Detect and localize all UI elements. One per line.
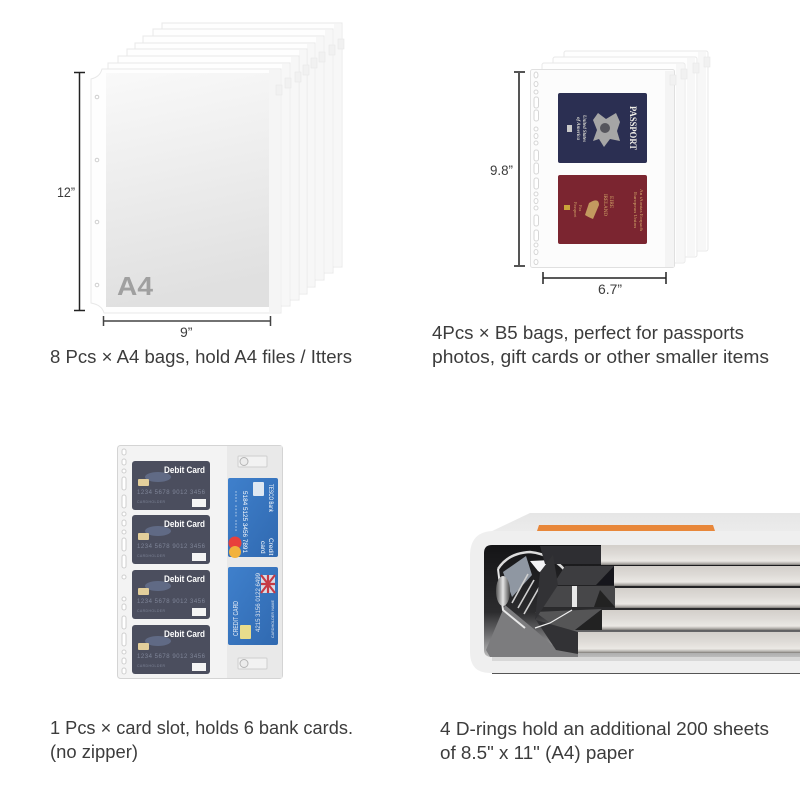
- passport: Ireland: Passport: [573, 202, 578, 218]
- passport: United States: PASSPORT: [628, 106, 638, 150]
- blue card: Tesco: 5184 5125 3456 7891: [241, 491, 248, 553]
- blue card: Tesco: TESCO Bank: [267, 484, 273, 513]
- passport: Ireland: [558, 175, 647, 244]
- blue card: Tesco: [228, 478, 278, 558]
- caption: B5 bags: 4Pcs × B5 bags, perfect for passports: [432, 323, 744, 343]
- A4 label: A4: [117, 271, 154, 301]
- binder top face: [488, 513, 800, 540]
- debit card 3: 1234 5678 9012 3456: [137, 599, 206, 605]
- blue card: Tesco: Credit: [267, 538, 274, 556]
- passport: Ireland: European Union: [633, 192, 638, 229]
- illustration: stack of A4 zipper bags: [91, 23, 344, 313]
- debit card 1: 1234 5678 9012 3456: [137, 490, 206, 496]
- passport: United States: United States: [581, 115, 586, 142]
- passport: United States: of America: [575, 117, 580, 140]
- zipper tab bottom: [238, 658, 267, 669]
- passport: Ireland: Pas: [578, 205, 583, 212]
- paper block 3: [615, 588, 800, 608]
- debit card 2: CARDHOLDER: [137, 554, 165, 558]
- passport: United States: [558, 93, 647, 163]
- panel: B5 bags: [432, 51, 769, 367]
- debit card 1: Debit Card: [164, 465, 205, 476]
- debit card 1: CARDHOLDER: [137, 500, 165, 504]
- dimension: 12 inch height: 12”: [57, 184, 75, 200]
- debit card 2: Debit Card: [164, 519, 205, 530]
- illustration: card slot sheet: [118, 446, 282, 678]
- dimension: 12 inch height: [57, 72, 85, 310]
- debit card 4: [132, 625, 210, 674]
- panel: D-ring binder: [440, 513, 800, 763]
- caption: B5 bags: photos, gift cards or other smaller items: [432, 347, 769, 367]
- paper block 2: [614, 566, 800, 586]
- dimension: 9.8 inch height: 9.8”: [490, 162, 513, 178]
- blue card: Credit Card with UK flag: [228, 567, 278, 645]
- illustration: stack of B5 zipper bags with passports: [530, 51, 710, 268]
- binder holes: [534, 72, 538, 264]
- binder holes: [122, 449, 126, 674]
- blue card: Credit Card with UK flag: CREDIT CARD: [233, 601, 240, 636]
- D-ring mechanism: [486, 546, 615, 657]
- caption: card slot: [50, 718, 353, 762]
- illustration: binder cross-section: [470, 513, 800, 674]
- blue card: Credit Card with UK flag: CARDHOLDER NAME: [271, 599, 275, 638]
- debit card 2: 1234 5678 9012 3456: [137, 544, 206, 550]
- debit card 4: 1234 5678 9012 3456: [137, 654, 206, 660]
- debit card 4: CARDHOLDER: [137, 664, 165, 668]
- paper block 1: [601, 545, 800, 565]
- zipper tab top: [238, 456, 267, 467]
- dimension: 9 inch width: 9”: [180, 324, 193, 340]
- debit card 2: [132, 515, 210, 564]
- caption: D-rings: 4 D-rings hold an additional 200 sheets: [440, 719, 769, 739]
- panel: A4 bags: [50, 23, 352, 367]
- binder cavity: [484, 545, 800, 657]
- panel: card slot: [50, 446, 353, 762]
- debit card 3: CARDHOLDER: [137, 609, 165, 613]
- binder shell: [470, 531, 800, 673]
- blue card: Tesco: card: [259, 541, 266, 554]
- caption: B5 bags: [432, 323, 769, 367]
- passport: Ireland: EIRE: [608, 196, 614, 209]
- caption: D-rings: [440, 719, 769, 763]
- dimension: 6.7 inch width: 6.7”: [598, 281, 622, 297]
- caption: A4 bags: 8 Pcs × A4 bags, hold A4 files / Itters: [50, 347, 352, 367]
- blue card: Credit Card with UK flag: 4215 3156 0122 6499: [255, 573, 262, 632]
- paper block 4: [602, 610, 800, 630]
- debit card 3: Debit Card: [164, 574, 205, 585]
- caption: card slot: 1 Pcs × card slot, holds 6 bank cards.: [50, 718, 353, 738]
- passport: Ireland: An tAontas Eorpach: [639, 189, 644, 232]
- orange strap: [537, 525, 715, 531]
- debit card 4: Debit Card: [164, 629, 205, 640]
- caption: card slot: (no zipper): [50, 742, 138, 762]
- debit card 3: [132, 570, 210, 619]
- dimension: 9 inch width: [103, 316, 270, 340]
- passport: Ireland: IRELAND: [602, 194, 608, 216]
- caption: D-rings: of 8.5" x 11" (A4) paper: [440, 743, 634, 763]
- dimension: 6.7 inch width: [543, 272, 666, 297]
- dimension: 9.8 inch height: [490, 72, 525, 266]
- paper block 5: [578, 632, 800, 653]
- blue card: Tesco: 0000 0000 0000: [234, 491, 238, 531]
- debit card 1: [132, 461, 210, 510]
